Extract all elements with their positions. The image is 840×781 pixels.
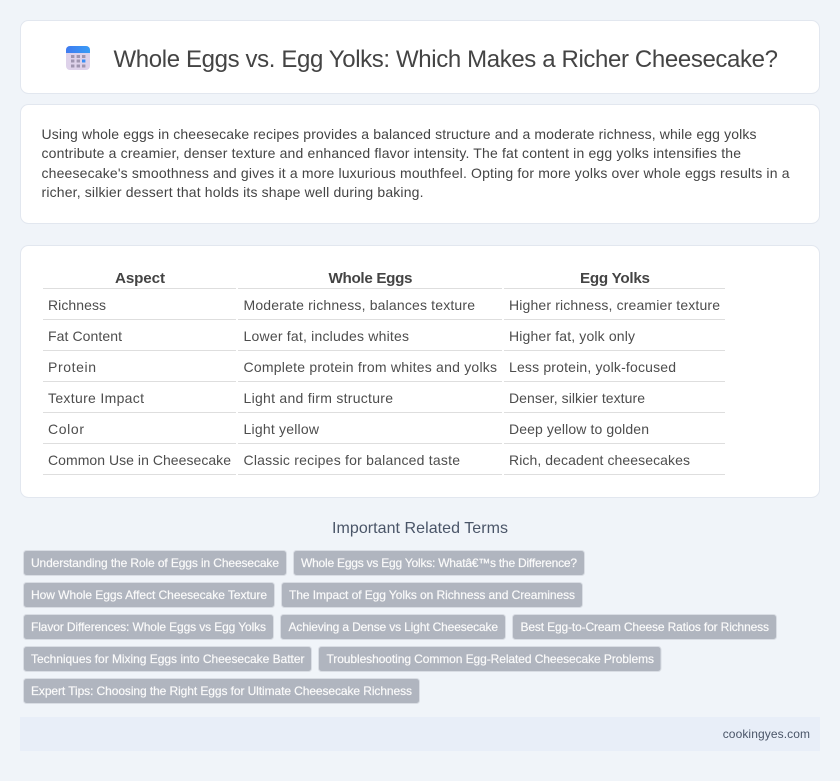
- row: richness: Richness: [48, 297, 106, 313]
- table header row: Aspect: [115, 270, 165, 287]
- row: richness: Higher richness, creamier texture: [509, 297, 720, 313]
- row: common use: [48, 452, 690, 468]
- tag: [280, 614, 506, 640]
- tag: Understanding the Role of Eggs in Cheesecake: [31, 556, 279, 570]
- row: protein: Complete protein from whites and yolks: [244, 359, 497, 375]
- footer: [20, 717, 820, 751]
- tag: Expert Tips: Choosing the Right Eggs for Ultimate Cheesecake Richness: [31, 684, 412, 698]
- footer source text: cookingyes.com: [723, 727, 810, 741]
- row: texture impact: Texture Impact: [48, 390, 144, 406]
- title: Whole Eggs vs. Egg Yolks: Which Makes a Richer Cheesecake?: [114, 46, 778, 73]
- intro text: Using whole eggs in cheesecake recipes provides a balanced structure and a moderate richness, while egg yolks: [42, 126, 756, 142]
- row: color: Deep yellow to golden: [509, 421, 649, 437]
- row: protein: [48, 359, 676, 375]
- tag: [318, 646, 661, 672]
- row: fat content: Lower fat, includes whites: [244, 328, 409, 344]
- row: richness: Moderate richness, balances texture: [244, 297, 475, 313]
- tag: [24, 550, 286, 576]
- tag: Flavor Differences: Whole Eggs vs Egg Yolks: [31, 620, 266, 634]
- tag: Whole Eggs vs Egg Yolks: Whatâ€™s the Difference?: [301, 556, 577, 570]
- icon: calendar: [66, 46, 90, 70]
- intro text: [42, 126, 790, 200]
- table header row: [115, 270, 650, 287]
- row: color: Color: [48, 421, 84, 437]
- row: protein: Less protein, yolk-focused: [509, 359, 676, 375]
- row: richness: [48, 297, 720, 313]
- tag: Techniques for Mixing Eggs into Cheesecake Batter: [31, 652, 304, 666]
- tag: [282, 582, 582, 608]
- table row lines: [43, 288, 725, 475]
- row: common use: Rich, decadent cheesecakes: [509, 452, 690, 468]
- tag: The Impact of Egg Yolks on Richness and Creaminess: [289, 588, 575, 602]
- intro text: richer, silkier dessert that holds its shape well during baking.: [42, 184, 424, 200]
- panel: intro paragraph: [20, 104, 820, 224]
- row: fat content: Higher fat, yolk only: [509, 328, 635, 344]
- tag: [24, 614, 274, 640]
- row: fat content: [48, 328, 635, 344]
- tag: How Whole Eggs Affect Cheesecake Texture: [31, 588, 267, 602]
- row: protein: Protein: [48, 359, 96, 375]
- panel: title header: [20, 20, 820, 94]
- tag: [24, 678, 420, 704]
- row: texture impact: [48, 390, 645, 406]
- row: common use: Common Use in Cheesecake: [48, 452, 231, 468]
- table header row: Egg Yolks: [580, 270, 650, 287]
- row: common use: Classic recipes for balanced taste: [244, 452, 460, 468]
- tag: [24, 582, 274, 608]
- row: texture impact: Light and firm structure: [244, 390, 393, 406]
- row: color: [48, 421, 649, 437]
- tag: Best Egg-to-Cream Cheese Ratios for Richness: [520, 620, 769, 634]
- table header row: Whole Eggs: [328, 270, 412, 287]
- tag: [512, 614, 776, 640]
- row: texture impact: Denser, silkier texture: [509, 390, 645, 406]
- tags: related terms: [24, 550, 776, 704]
- intro text: contribute a creamier, denser texture and enhanced flavor intensity. The fat content in egg yolks intensifies the: [42, 145, 741, 161]
- row: color: Light yellow: [244, 421, 320, 437]
- intro text: cheesecake's smoothness and gives it a more luxurious mouthfeel. Opting for more yolks over whole eggs results in a: [42, 165, 790, 181]
- panel: comparison table: [20, 246, 820, 498]
- tag: Troubleshooting Common Egg-Related Cheesecake Problems: [326, 652, 654, 666]
- row: fat content: Fat Content: [48, 328, 122, 344]
- tag: [294, 550, 584, 576]
- heading: related terms: Important Related Terms: [332, 520, 508, 537]
- tag: Achieving a Dense vs Light Cheesecake: [288, 620, 498, 634]
- tag: [24, 646, 312, 672]
